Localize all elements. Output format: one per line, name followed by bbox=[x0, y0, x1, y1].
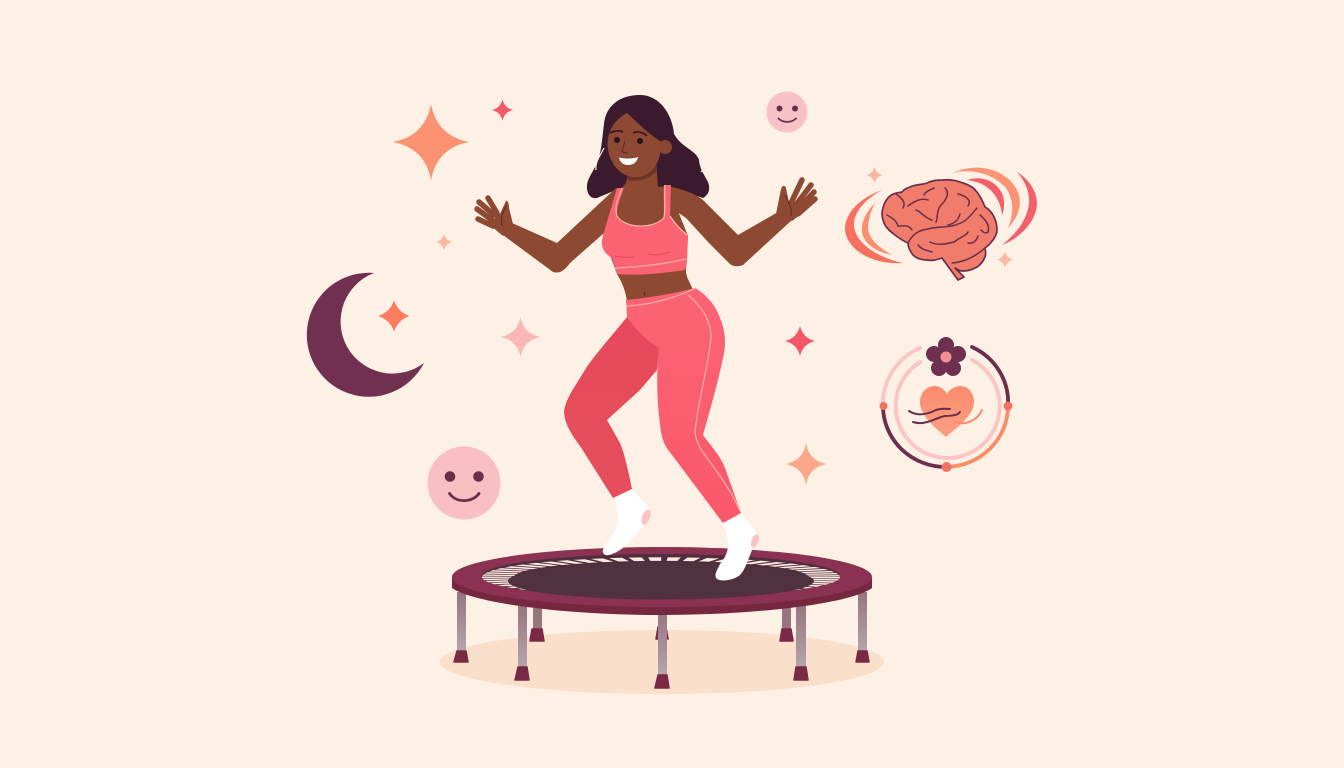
icon: large smiley bbox=[428, 446, 500, 520]
brain sparkle right bbox=[997, 252, 1013, 268]
trampoline bbox=[452, 547, 872, 688]
outer ring arcs bbox=[883, 347, 1008, 467]
face bbox=[608, 113, 661, 177]
star: pink bbox=[500, 317, 540, 357]
mat bbox=[508, 562, 814, 600]
spring ring bbox=[482, 554, 840, 598]
star: large orange bbox=[393, 104, 469, 180]
neck shadow bbox=[628, 164, 656, 181]
front sock bbox=[715, 514, 761, 580]
inner ring bbox=[896, 360, 1000, 458]
woman bbox=[477, 95, 815, 580]
smile bbox=[619, 157, 638, 165]
icon: crescent moon bbox=[307, 273, 424, 397]
star: small peach bbox=[436, 234, 452, 250]
back leg bbox=[564, 317, 660, 498]
swirls bbox=[845, 168, 1037, 263]
right arm bbox=[660, 186, 792, 266]
star: near moon bbox=[378, 300, 410, 332]
star: peach right bbox=[786, 444, 826, 484]
front leg bbox=[626, 288, 741, 523]
ear bbox=[658, 140, 672, 154]
left arm bbox=[503, 188, 628, 273]
neck bbox=[618, 160, 658, 195]
front legs bbox=[454, 592, 869, 688]
back sock bbox=[603, 489, 652, 555]
right hand bbox=[776, 180, 815, 221]
breath lines bbox=[909, 409, 982, 423]
back legs bbox=[530, 608, 793, 641]
hair back bbox=[587, 95, 709, 198]
left hand bbox=[477, 198, 513, 236]
brain sparkle left bbox=[866, 167, 882, 183]
hair highlights bbox=[596, 134, 704, 172]
ring nodes bbox=[880, 402, 1012, 472]
brain body bbox=[882, 180, 997, 280]
brain folds bbox=[887, 188, 989, 263]
icon: brain with swirls bbox=[845, 167, 1037, 280]
frame top bbox=[452, 547, 872, 607]
frame side bbox=[452, 578, 872, 615]
sports top bbox=[602, 185, 688, 275]
heart bbox=[920, 386, 974, 437]
legging seams bbox=[626, 288, 740, 511]
icon: balance ring with heart and flower bbox=[880, 337, 1012, 472]
navel bbox=[644, 292, 645, 296]
star: red right bbox=[785, 326, 815, 356]
star: small red bbox=[492, 100, 513, 120]
flower bbox=[926, 337, 966, 376]
trampoline shadow bbox=[440, 630, 884, 694]
icon: small smiley bbox=[766, 92, 808, 132]
torso bbox=[603, 186, 693, 302]
springs bbox=[498, 559, 824, 595]
eyes and brows bbox=[610, 131, 647, 153]
